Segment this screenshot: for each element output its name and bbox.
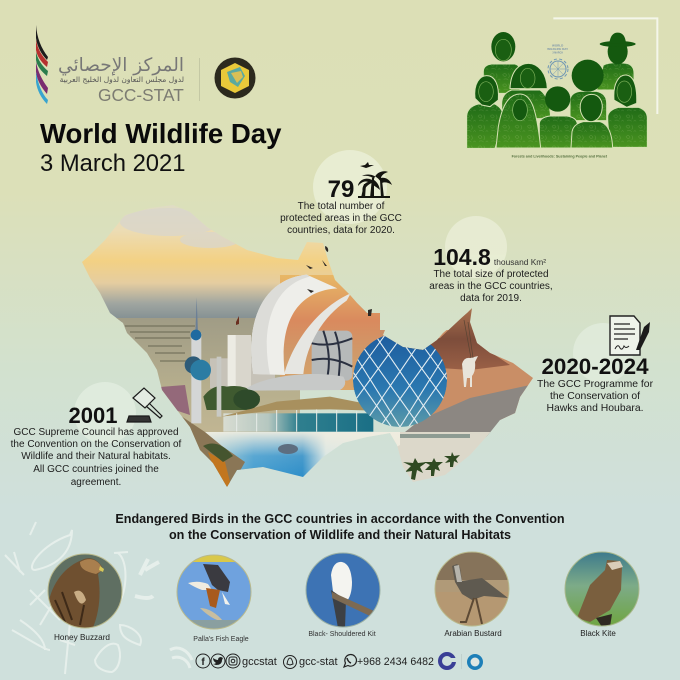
handle: gccstat: gccstat <box>242 656 277 668</box>
poster: short hair figure <box>502 63 551 119</box>
map: sky <box>70 200 370 322</box>
stat backdrop circles <box>74 150 633 444</box>
decorative leaves bottom left <box>5 522 192 674</box>
icon: whatsapp <box>344 655 356 667</box>
stat description <box>429 269 553 304</box>
stat description: countries, data for 2020. <box>287 225 395 236</box>
title: World Wildlife Day <box>40 118 282 149</box>
map: clouds <box>120 208 240 248</box>
landmark: kuwait towers <box>185 297 221 423</box>
poster: rear right figure with hat <box>597 33 636 90</box>
stat number 104.8: 104.8 <box>433 244 491 270</box>
landmark: trees <box>233 389 260 409</box>
photo: fish eagle <box>178 556 250 628</box>
stat: 2001 <box>11 403 182 488</box>
landmark: silver building <box>312 331 352 381</box>
poster: right front figure <box>608 75 647 147</box>
phone number: +968 2434 6482 <box>357 656 434 668</box>
map: landmarks <box>184 274 374 432</box>
poster: hooded figure <box>496 94 541 148</box>
map: turquoise sea <box>205 432 400 480</box>
World Wildlife Day 2021 poster <box>467 18 657 158</box>
poster: event name: 3 MARCH <box>552 52 563 55</box>
label: honey buzzard: Honey Buzzard <box>54 633 110 642</box>
logo GCC-STAT: GCC-STAT <box>98 85 184 105</box>
stat unit: thousand Km² <box>494 257 546 267</box>
label: kite: Black- Shouldered Kit <box>308 631 376 638</box>
logo: GCC-STAT <box>36 25 256 105</box>
map: tiny fish <box>278 444 298 454</box>
icon: facebook: f <box>201 657 205 668</box>
map: oman mountain <box>405 308 510 370</box>
map: oryx <box>462 320 478 387</box>
stat number 79: 79 <box>328 176 354 203</box>
section heading: endangered birds: on the Conservation of Wildlife and their Natural Habitats <box>169 528 511 542</box>
date: 3 March 2021 <box>40 150 186 177</box>
logo emblem <box>214 58 256 98</box>
bird: arabian bustard <box>435 552 510 638</box>
map: purple rock <box>160 385 190 415</box>
photo: kite <box>305 552 381 628</box>
label: bustard: Arabian Bustard <box>444 629 502 638</box>
poster: front left figure <box>467 76 504 148</box>
handle: gcc-stat: gcc-stat <box>299 656 338 668</box>
icon: twitter <box>211 654 225 668</box>
map collage of GCC countries <box>70 200 540 492</box>
stat description: All GCC countries joined the <box>33 464 159 475</box>
map: sunset behind arcs <box>280 275 380 390</box>
landmark: disc building <box>247 374 345 391</box>
poster: short hair front figure <box>571 94 613 148</box>
logo: round badge <box>467 654 483 670</box>
poster: afro figure <box>570 60 607 121</box>
icon: snapchat <box>284 656 296 668</box>
stat description: agreement. <box>71 477 121 488</box>
map: aldar sphere <box>353 336 447 427</box>
birds flying over map <box>236 246 372 325</box>
stat description: the Convention on the Conservation of <box>11 439 182 450</box>
stat description: Wildlife and their Natural habitats. <box>21 451 171 462</box>
stat year: 2001 <box>69 403 117 428</box>
stat description: The total number of <box>298 201 385 212</box>
landmark: fort <box>210 335 275 388</box>
stat description: data for 2019. <box>460 293 522 304</box>
section heading: endangered birds: Endangered Birds in the GCC countries in accordance with the Convention <box>115 512 565 526</box>
stat description: The GCC Programme for <box>537 379 654 390</box>
map: harbour water <box>398 432 490 482</box>
logo arabic subtitle: لدول مجلس التعاون لدول الخليج العربية <box>60 75 184 84</box>
stat description: Hawks and Houbara. <box>546 403 644 414</box>
photo: black kite <box>565 552 640 627</box>
map: desert plain <box>116 318 300 470</box>
poster: globe icon <box>548 59 568 79</box>
icon: signed document <box>610 316 650 355</box>
section heading: endangered birds <box>115 512 565 542</box>
landmark: white arcs <box>251 275 351 375</box>
stat description <box>11 427 182 488</box>
map: rocky shore <box>182 416 245 487</box>
icon: gavel <box>127 388 162 422</box>
bird: honey buzzard <box>48 554 122 642</box>
poster: event name: WILDLIFE DAY <box>547 47 568 51</box>
icon: instagram <box>226 654 240 668</box>
poster: event name <box>547 43 568 55</box>
footer: social and contact <box>196 654 483 670</box>
poster: curly figure <box>539 86 577 148</box>
logo arabic name: المركز الإحصائي <box>58 55 184 76</box>
icon: facebook <box>196 654 210 668</box>
stat: 79 protected areas <box>280 176 402 236</box>
landmark: greenery <box>203 386 260 410</box>
logo ribbon <box>36 25 48 104</box>
bird: black kite <box>565 552 640 638</box>
poster: caption: Forests and Livelihoods: Sustaining People and Planet <box>512 154 608 158</box>
stat description <box>537 379 654 414</box>
poster: rear left figure <box>483 32 520 93</box>
label: black kite: Black Kite <box>580 629 616 638</box>
stat description <box>280 201 402 236</box>
photo: honey buzzard <box>48 554 122 628</box>
bird: pallas fish eagle <box>176 554 252 642</box>
map: oman sand <box>380 330 540 420</box>
stat years: 2020-2024 <box>541 354 649 379</box>
map: distant vegetation specks <box>125 325 195 362</box>
map: grey rocky coast <box>405 386 528 437</box>
stat description: the Conservation of <box>550 391 640 402</box>
stat: 2020-2024 <box>537 354 654 414</box>
landmark: pavilion building <box>222 396 374 432</box>
bird: black-shouldered kite <box>305 552 381 638</box>
map: palm trees <box>403 452 460 480</box>
poster: event name: WORLD <box>552 43 564 47</box>
logo: gcc-stat mark <box>440 654 456 668</box>
photo: bustard <box>435 552 510 627</box>
label: fish eagle: Palla's Fish Eagle <box>193 636 249 643</box>
stat description: The total size of protected <box>433 269 549 280</box>
stat description: protected areas in the GCC <box>280 213 402 224</box>
stat description: areas in the GCC countries, <box>429 281 553 292</box>
stat description: GCC Supreme Council has approved <box>13 427 179 438</box>
icon: palm trees with bird <box>358 162 392 198</box>
stat: 104.8 thousand km2 <box>429 244 553 304</box>
